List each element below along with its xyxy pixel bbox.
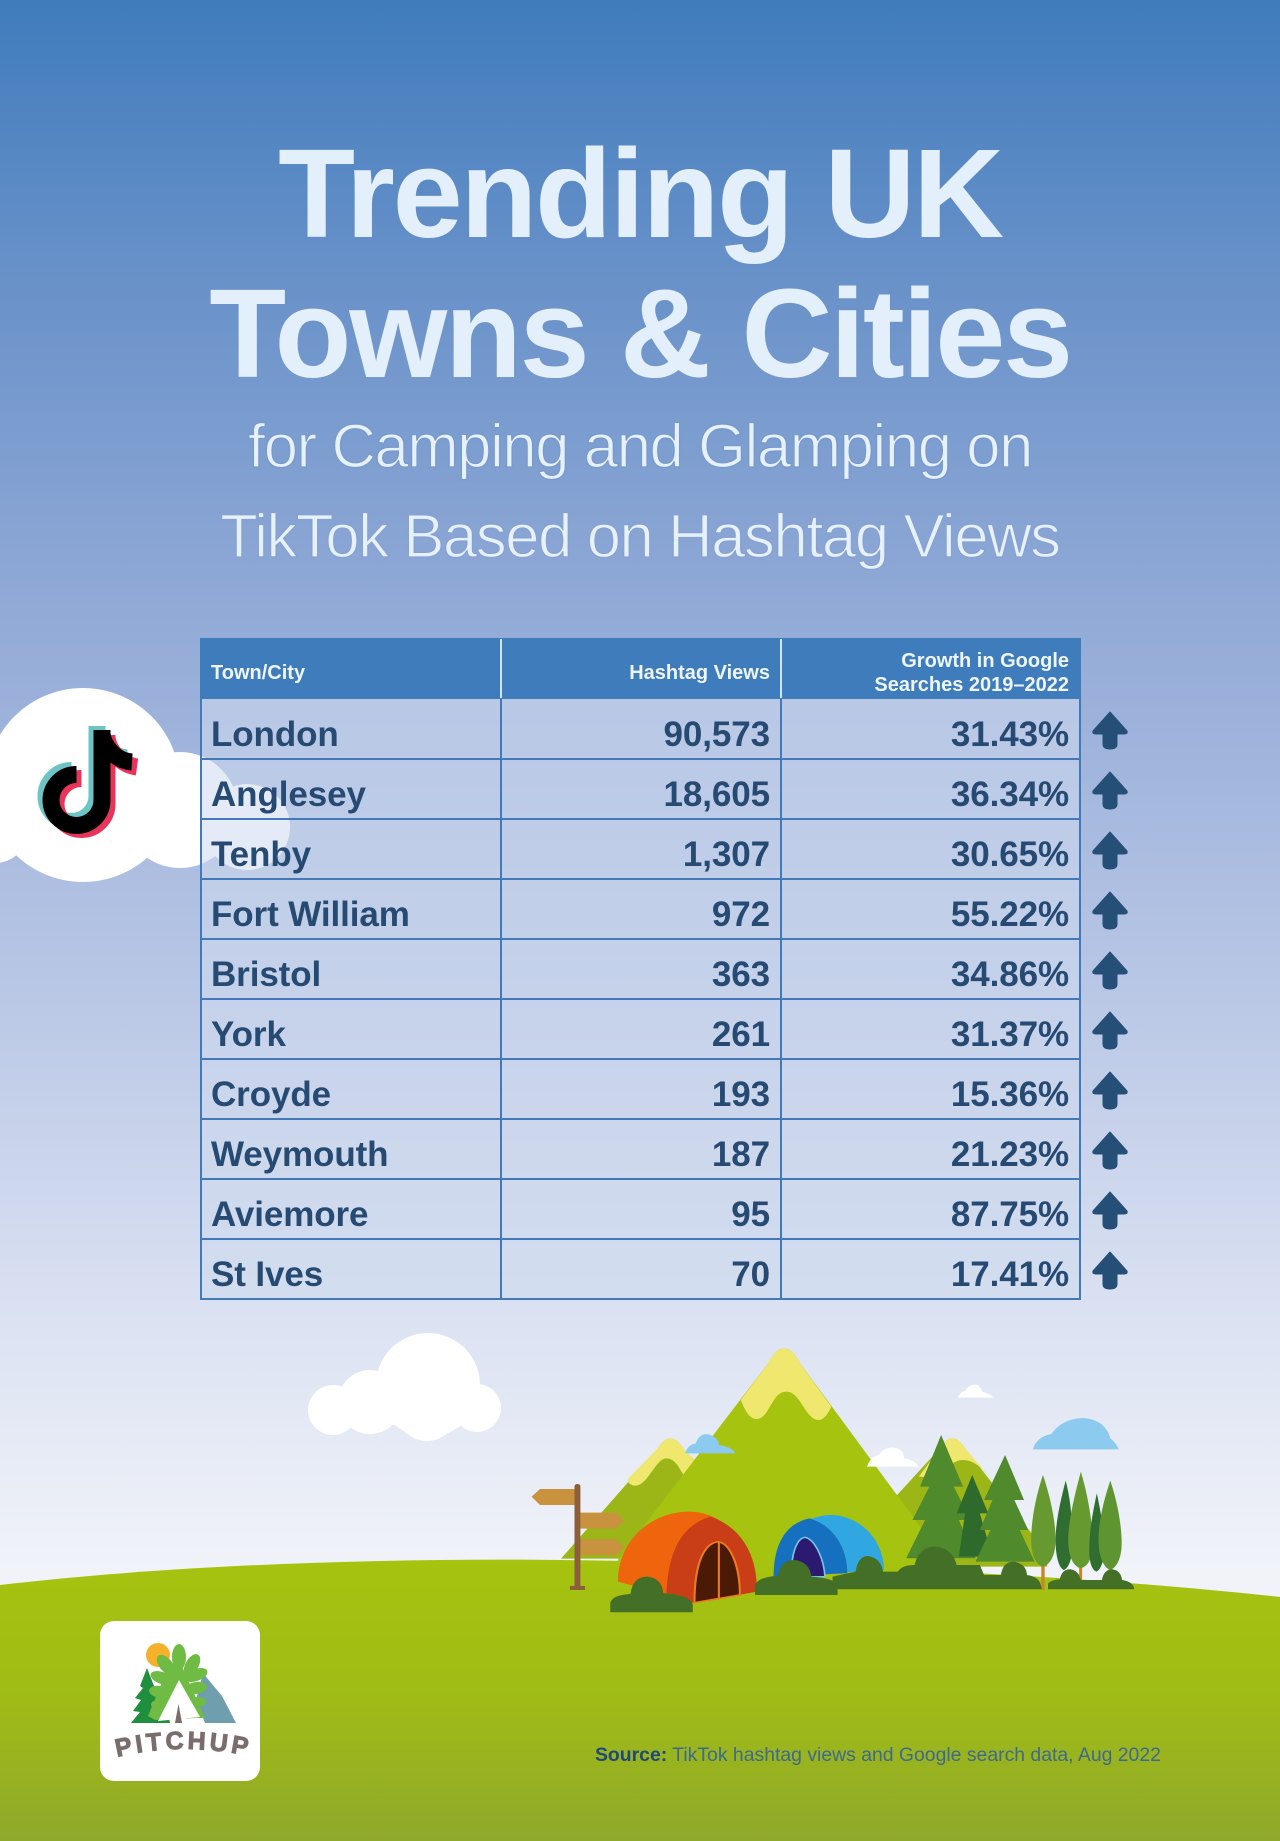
row: Fort William: 55.22% — [951, 895, 1069, 934]
table header: Hashtag Views — [629, 662, 770, 684]
row: Tenby: Tenby — [211, 835, 311, 874]
row: Weymouth: 187 — [712, 1135, 770, 1174]
table header: Town/City — [211, 662, 305, 684]
row: Aviemore: 87.75% — [951, 1195, 1069, 1234]
data table — [200, 638, 1081, 1300]
icon: tiktok logo — [38, 726, 138, 838]
subtitle — [220, 412, 1060, 571]
row: Anglesey: Anglesey — [211, 775, 366, 814]
main mountain — [618, 1348, 925, 1573]
row: Anglesey: 36.34% — [951, 775, 1069, 814]
pine trees — [906, 1435, 1035, 1562]
orange tent — [618, 1512, 757, 1603]
table header: Growth in Google — [901, 650, 1069, 672]
row: Anglesey — [200, 759, 1081, 819]
row: York: 31.37% — [951, 1015, 1069, 1054]
row: London: London — [211, 715, 339, 754]
row: St Ives: St Ives — [211, 1255, 323, 1294]
row: Anglesey: 18,605 — [664, 775, 770, 814]
small clouds — [685, 1385, 1119, 1467]
logo mountain — [196, 1673, 236, 1723]
row: Aviemore: Aviemore — [211, 1195, 368, 1234]
icon: up arrows — [1092, 712, 1128, 1290]
title: Towns & Cities — [209, 263, 1071, 404]
row: Bristol: Bristol — [211, 955, 321, 994]
row: Croyde: 193 — [712, 1075, 770, 1114]
row: Weymouth — [200, 1119, 1081, 1179]
row: Croyde: Croyde — [211, 1075, 331, 1114]
row: York — [200, 999, 1081, 1059]
signpost — [532, 1484, 624, 1590]
logo pine — [131, 1668, 170, 1723]
row: Fort William: 972 — [712, 895, 770, 934]
row: Bristol — [200, 939, 1081, 999]
subtitle: TikTok Based on Hashtag Views — [220, 502, 1060, 571]
logo leaves — [148, 1644, 209, 1720]
row: York: York — [211, 1015, 286, 1054]
right mountain — [896, 1438, 1047, 1567]
left mountain — [561, 1438, 761, 1559]
row: Bristol: 34.86% — [951, 955, 1069, 994]
row: Aviemore — [200, 1179, 1081, 1239]
white cloud — [308, 1333, 501, 1441]
row: Weymouth: 21.23% — [951, 1135, 1069, 1174]
row: St Ives: 17.41% — [951, 1255, 1069, 1294]
row: London: 31.43% — [951, 715, 1069, 754]
tiktok cloud — [0, 688, 290, 882]
row: Tenby — [200, 819, 1081, 879]
row: St Ives — [200, 1239, 1081, 1299]
row: Bristol: 363 — [712, 955, 770, 994]
title — [209, 123, 1071, 404]
logo wordmark: PITCHUP — [114, 1731, 248, 1758]
row: London: 90,573 — [664, 715, 770, 754]
subtitle: for Camping and Glamping on — [248, 412, 1032, 481]
row: St Ives: 70 — [731, 1255, 770, 1294]
row: Croyde — [200, 1059, 1081, 1119]
table header: Searches 2019–2022 — [874, 674, 1069, 696]
row: Croyde: 15.36% — [951, 1075, 1069, 1114]
row: Tenby: 30.65% — [951, 835, 1069, 874]
source note: Source: TikTok hashtag views and Google search data, Aug 2022 — [595, 1744, 1161, 1766]
bushes — [610, 1547, 1134, 1612]
blue tent — [774, 1515, 884, 1577]
title: Trending UK — [278, 123, 1002, 264]
table header — [200, 638, 1081, 699]
pitchup logo — [100, 1621, 260, 1781]
row: Aviemore: 95 — [731, 1195, 770, 1234]
row: Fort William: Fort William — [211, 895, 410, 934]
row: London — [200, 699, 1081, 759]
logo wordmark — [114, 1731, 248, 1758]
row: Weymouth: Weymouth — [211, 1135, 388, 1174]
row: Fort William — [200, 879, 1081, 939]
row: Tenby: 1,307 — [683, 835, 770, 874]
row: York: 261 — [712, 1015, 770, 1054]
cypress trees — [1031, 1472, 1122, 1590]
